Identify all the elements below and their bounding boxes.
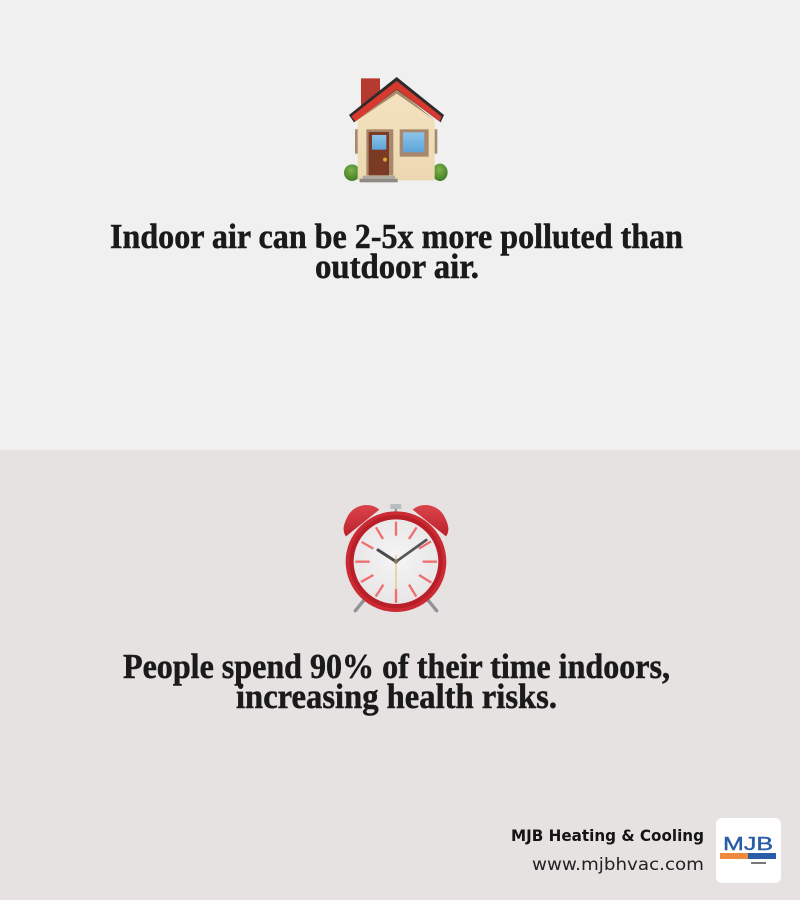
legs — [355, 597, 437, 611]
icon: house — [344, 77, 448, 182]
top button — [390, 504, 401, 516]
heading: time indoors: People spend 90% of their time indoors, — [123, 647, 670, 686]
door — [366, 129, 393, 175]
panel: indoor air pollution — [0, 0, 800, 450]
brand name: MJB Heating & Cooling — [511, 826, 704, 845]
clock rim — [346, 511, 446, 612]
chimney — [361, 78, 380, 107]
website: www.mjbhvac.com — [532, 855, 704, 875]
heading: indoor air: Indoor air can be 2-5x more polluted than — [110, 217, 683, 256]
heading: indoor air — [110, 217, 683, 286]
house wall — [358, 89, 435, 180]
bushes — [344, 164, 448, 181]
gable shadow — [358, 89, 435, 120]
icon: alarm clock — [344, 504, 448, 612]
roof — [349, 77, 444, 122]
bells — [344, 505, 448, 536]
window — [400, 129, 429, 157]
hour ticks — [355, 522, 437, 603]
heading: time indoors — [123, 647, 670, 716]
shutters — [355, 129, 437, 154]
panel: time indoors — [0, 450, 800, 900]
logo — [716, 818, 781, 883]
clock hands — [378, 540, 426, 589]
logo: MJB — [723, 834, 773, 854]
heading: time indoors: increasing health risks. — [236, 677, 557, 716]
steps — [360, 176, 398, 182]
heading: indoor air: outdoor air. — [315, 247, 479, 286]
